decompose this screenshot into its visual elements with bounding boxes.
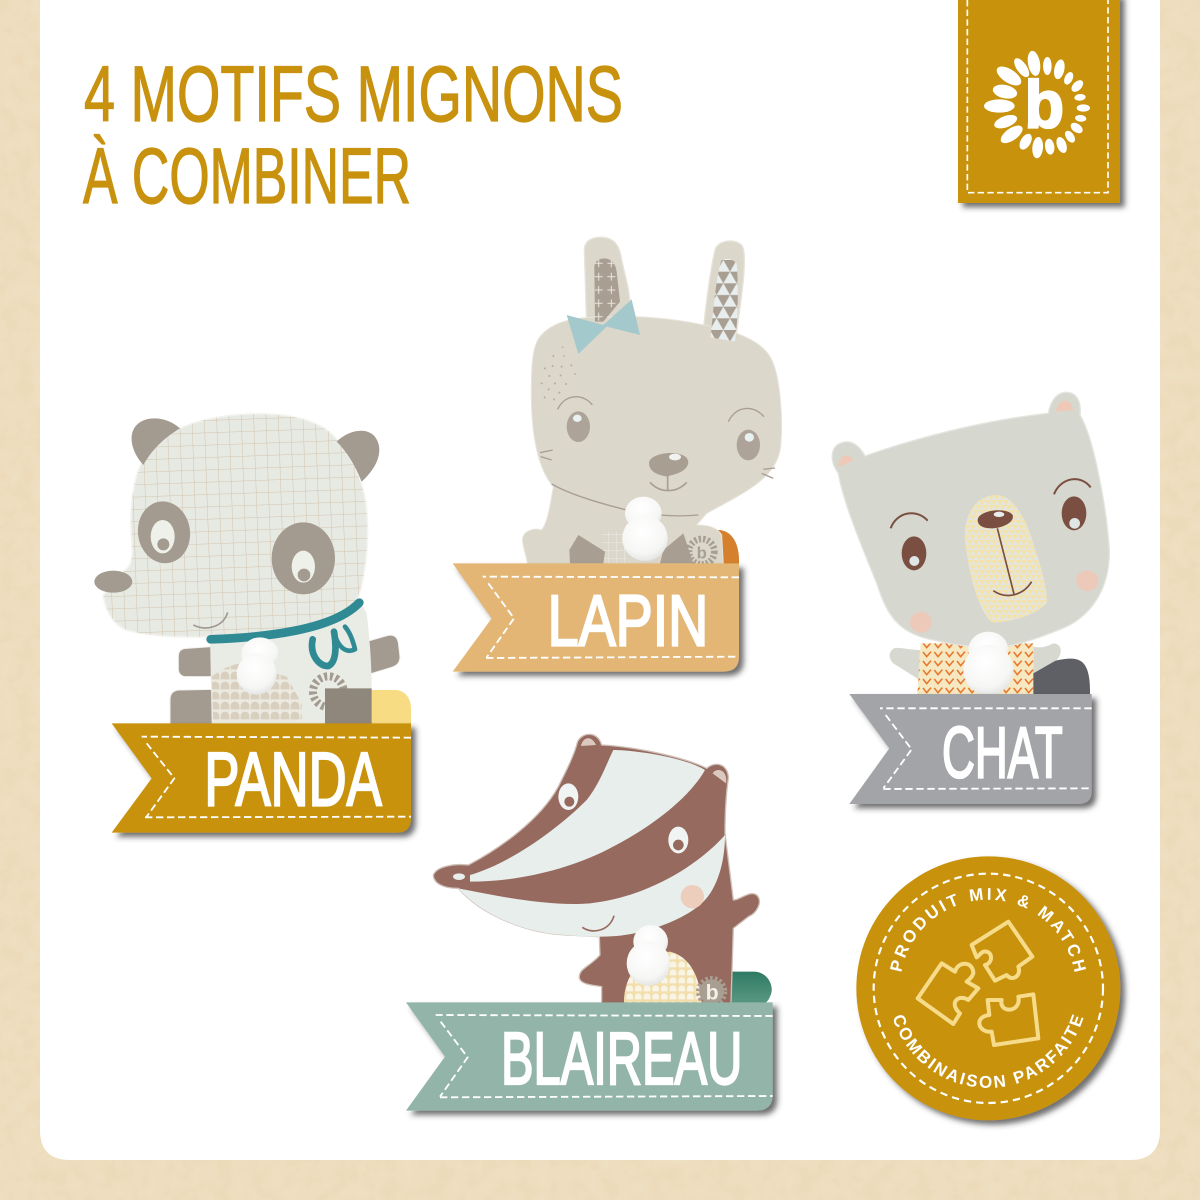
panda body (210, 598, 372, 725)
panda arms (170, 635, 400, 725)
freckles (541, 346, 576, 400)
ears (132, 418, 379, 482)
panda left eye (134, 498, 194, 567)
hedgehog logo (689, 539, 714, 564)
cat muzzle (965, 495, 1047, 623)
belly pattern (624, 952, 702, 1003)
ear pattern left (594, 258, 620, 322)
label: LAPIN: LAPIN (548, 581, 708, 662)
peg (627, 925, 670, 986)
body patches (569, 532, 693, 563)
cat nose (978, 510, 1013, 528)
badge arc text (890, 888, 1086, 1088)
brand tag with logo (958, 0, 1120, 203)
hedgehog logo: b (706, 980, 719, 1004)
badger silhouette (433, 734, 759, 1003)
label: BLAIREAU: BLAIREAU (501, 1017, 742, 1100)
blue bow (567, 299, 640, 354)
icon: puzzle pieces (918, 922, 1038, 1045)
badge: mix and match (856, 856, 1130, 1129)
rabbit mouth (650, 475, 687, 491)
belly pattern (212, 663, 302, 722)
lower white jaw (458, 835, 725, 937)
hedgehog logo (313, 676, 344, 707)
banner stitching (880, 708, 1092, 789)
icon: brand logo: b (1025, 68, 1064, 142)
banner: blaireau (406, 1002, 773, 1111)
panel: lapin figure (453, 237, 782, 672)
rabbit eyes (567, 411, 760, 460)
pink ear inners (838, 401, 1073, 467)
fold behind banner (370, 690, 411, 725)
peg (237, 637, 279, 695)
banner stitching (142, 737, 411, 817)
cat mouth (993, 528, 1032, 595)
banner: lapin (453, 563, 739, 672)
dark fold behind banner (1033, 659, 1090, 697)
title: À COMBINER (83, 131, 411, 220)
cat arms (890, 643, 1061, 679)
panda right eye (272, 522, 335, 594)
rabbit left ear (584, 237, 633, 327)
lower right leg (325, 688, 372, 725)
rabbit nose (649, 453, 688, 477)
teal bandana (211, 603, 359, 666)
upper white stripe (470, 750, 705, 882)
panda head (103, 414, 368, 637)
panel: chat figure (832, 392, 1109, 804)
fold behind banner (707, 530, 739, 573)
badger cheek (681, 885, 704, 908)
rabbit brows and whiskers (540, 397, 775, 516)
panda nose (94, 571, 132, 593)
peg (622, 497, 668, 561)
title: 4 MOTIFS MIGNONS (84, 49, 623, 138)
badge arc text: COMBINAISON PARFAITE (894, 1014, 1084, 1088)
rabbit right ear (703, 241, 744, 343)
label: PANDA: PANDA (204, 738, 382, 823)
icon: brand logo (984, 50, 1090, 159)
banner stitching (483, 577, 739, 658)
badger eyes (558, 783, 688, 853)
cat brows (891, 479, 1091, 528)
badger mouth (582, 916, 614, 931)
banner: chat (849, 694, 1092, 804)
cat cheeks (910, 570, 1098, 633)
badge disc (856, 856, 1120, 1120)
label: CHAT: CHAT (942, 713, 1063, 794)
badger ear inners (581, 738, 726, 783)
panel: blaireau figure (406, 734, 773, 1111)
badger nose highlight (453, 873, 465, 880)
banner: panda (112, 723, 411, 833)
head grid (103, 414, 368, 637)
cat scarf (917, 643, 1033, 695)
title (83, 49, 623, 220)
cat eyes (902, 496, 1086, 570)
cat head (832, 392, 1109, 647)
panel: panda figure (94, 414, 411, 833)
peg (963, 632, 1013, 695)
banner stitching (436, 1015, 773, 1097)
green fold behind banner (728, 972, 772, 1005)
panda mouth (193, 612, 228, 628)
hedgehog logo (699, 979, 724, 1004)
rabbit body and head (523, 317, 782, 565)
hedgehog logo: b (697, 543, 707, 562)
ear pattern right (711, 259, 738, 342)
badge arc text: PRODUIT MIX & MATCH (890, 888, 1086, 972)
